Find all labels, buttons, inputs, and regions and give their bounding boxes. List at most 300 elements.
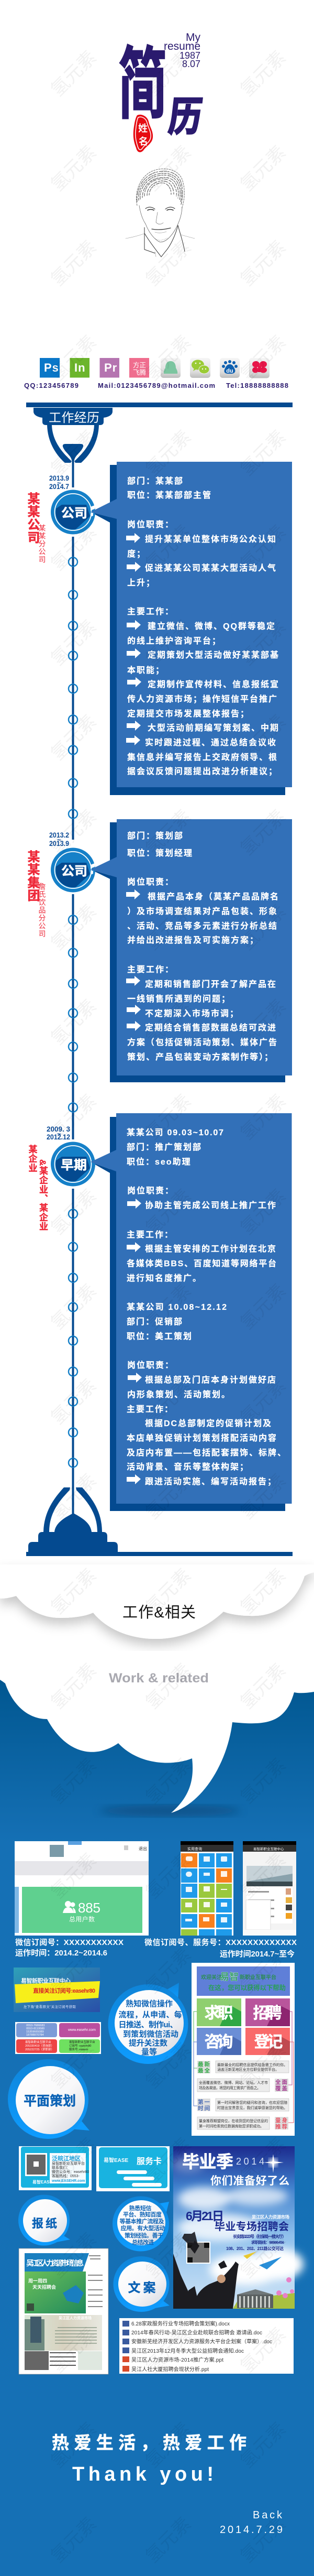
poster: graduation season job fair: 6月21日 [186,2209,224,2223]
bubble: SMS and Baidu skills: 总结改进 [132,2238,154,2246]
newspaper layout [19,2248,108,2374]
heading: resume caption: My [186,31,200,44]
watermark pattern: 氢元素 [142,616,195,670]
banner: contact panels: 订阅号: easehr80 [69,2044,91,2048]
bubble: WeChat skills: 熟知微信操作 [126,1999,173,2008]
card text: 传人力资源市场；操作短信平台推广 [127,694,278,704]
watermark pattern: 氢元素 [47,521,100,575]
icon: In [70,358,89,377]
watermark pattern: 氢元素 [142,332,195,385]
watermark pattern: 氢元素 [47,711,100,765]
pin: cup holder at top of timeline [47,425,99,463]
card text: 上升； [127,578,155,588]
panel: job card 3 [91,1113,292,1511]
company label: 某某公司 某某分公司 [25,492,46,563]
newspaper layout: 天天招聘会 [32,2284,56,2290]
watermark pattern: 氢元素 [142,1186,195,1239]
row: 第一时间: 第一 [198,2099,210,2105]
star flare [264,2154,284,2173]
watermark pattern: 氢元素 [237,1565,290,1618]
icon: 方正飞腾 [129,358,149,377]
row: 全面覆盖: 覆盖 [275,2085,288,2092]
arrows [126,533,141,745]
closing text: 热爱生活，热爱工作: 热爱生活，热爱工作 [52,2433,246,2452]
company label: 某企业 &某企业、某企业: &某企业、某企业 [38,1159,48,1231]
icon: red name seal: 姓 [138,123,148,134]
card text: 进行知名度推广。 [127,1273,202,1283]
back date [220,2509,283,2536]
contact details: Tel:18888888888 [226,382,288,389]
file list [119,2318,294,2374]
watermark pattern: 氢元素 [47,47,100,101]
row: 最新最全 [197,2061,289,2074]
card text: 职位：美工策划 [127,1331,193,1341]
card: service card: 服务卡 [137,2156,162,2166]
card text: 职位：策划经理 [127,848,193,858]
watermark pattern: 氢元素 [142,1091,195,1144]
tile: 登记 [245,2028,290,2055]
card text: 根据总部及门店本身计划做好店 [145,1375,277,1385]
watermark pattern: 氢元素 [142,2514,195,2567]
card text: 、活动、竞品等多元素进行分析总结 [127,921,278,931]
row: 第一时间: 时提出宝贵意见，我们诚挚感谢您的帮助。 [217,2105,287,2110]
watermark pattern: 氢元素 [47,1660,100,1713]
watermark pattern: 氢元素 [47,2324,100,2377]
watermark pattern: 氢元素 [142,711,195,765]
company label: 某某公司 某某分公司: 某某分公司 [38,524,46,563]
card text [127,476,279,776]
watermark pattern: 氢元素 [237,237,290,290]
card: QR business card: 联系我们： [52,2165,70,2170]
watermark pattern: 氢元素 [142,142,195,195]
watermark pattern: 氢元素 [237,332,290,385]
watermark pattern: 氢元素 [237,901,290,954]
decorative white cloud with shadow [0,1564,314,1639]
bubble: 报纸 [18,2195,70,2245]
watermark pattern: 氢元素 [47,901,100,954]
icon: Baidu paw: du [226,368,233,374]
row: 最新最全: 最全 [198,2067,210,2074]
card text: 度； [127,549,146,559]
portrait: pencil sketch of a man [126,169,195,257]
card text: 内形象策划、活动策划。 [127,1389,231,1399]
heading: resume caption: 8.07 [182,59,200,69]
icon: users [63,1901,76,1913]
bubble: SMS and Baidu skills: 应用。有大型活动 [120,2224,165,2232]
card: QR business card: 易智新职业互联平台 [52,2161,85,2166]
banner: contact panels: 205330419（咨询部） [25,2044,54,2048]
newspaper layout: 周一周四 [28,2278,47,2284]
watermark pattern: 氢元素 [237,1280,290,1334]
card text: 部门：策划部 [127,831,184,841]
card text: 部门：推广策划部 [127,1142,202,1152]
banner: subscribe to easehr80: 直接关注订阅号:easehr80 [33,1987,95,1994]
poster: graduation season job fair: 108、201、202、211路公交可达 [226,2246,284,2251]
file list: 安徽新芜经济开发区人力资源服务大平台企划案（草案）.doc [131,2338,272,2345]
watermark pattern: 氢元素 [237,47,290,101]
watermark pattern: 氢元素 [237,2134,290,2188]
watermark pattern: 氢元素 [47,996,100,1049]
watermark pattern: 氢元素 [47,237,100,290]
date: 2013.2 to 2013.9: 2013.2 [49,831,69,839]
card text: 大型活动前期编写策划案、中期 [148,723,279,733]
watermark pattern: 氢元素 [237,427,290,480]
bubble: WeChat skills: 流程，从申请、每 [118,2010,182,2019]
company label: 某某集团 詹氏饮品分公司: 詹氏饮品分公司 [38,883,46,938]
row: 第一时间 [197,2099,289,2112]
bubble: 报纸: 报纸 [32,2217,57,2230]
watermark pattern: 氢元素 [142,1944,195,1998]
watermark pattern: 氢元素 [47,1755,100,1808]
row: 量身推荐: 第一时间检索岗位数据库助您求职成功。 [199,2124,264,2128]
watermark pattern: 氢元素 [142,1850,195,1903]
card text: 一线销售所遇到的问题； [127,994,231,1004]
banner: contact panels [15,2022,101,2054]
card text: 定期策划大型活动做好某某部基 [148,650,279,660]
watermark pattern: 氢元素 [142,996,195,1049]
icon: QQ [161,358,181,378]
bubble: 平面策划 [8,2059,89,2139]
card text: 本职能； [127,665,165,675]
watermark pattern: 氢元素 [142,521,195,575]
card text: 定期提交市场发展整体报告； [127,709,250,719]
watermark pattern: 氢元素 [47,427,100,480]
watermark pattern: 氢元素 [47,806,100,860]
file icons [122,2321,129,2372]
clouds [173,2157,304,2285]
bubble: SMS and Baidu skills: 等基本推广流程及 [119,2218,164,2225]
card text: 职位：seo助理 [127,1157,192,1167]
watermark pattern: 氢元素 [47,2134,100,2188]
company label: 某某公司 某某分公司: 某某公司 [25,492,40,544]
QR code [186,2242,210,2264]
card face [116,1113,292,1504]
card text: 定期制作宣传材料、信息报纸宣 [148,679,279,689]
poster: graduation season job fair: 毕业专场招聘会 [215,2221,289,2233]
watermark pattern: 氢元素 [237,2039,290,2093]
tile: 登记: 登记 [254,2034,283,2051]
screenshot: admin dashboard 885 users [15,1841,149,1936]
row: 第一时间: 时间 [198,2105,210,2112]
watermark pattern: 氢元素 [237,806,290,860]
icon: Pr [99,358,119,377]
watermark pattern: 氢元素 [237,2514,290,2567]
watermark pattern: 氢元素 [47,1091,100,1144]
pin base: dome and steps [26,1483,293,1556]
bubble: WeChat skills: 量等 [141,2047,157,2057]
node: company 2 badge [51,848,117,892]
tile: 招聘: 招聘 [253,2005,282,2022]
bubble: SMS and Baidu skills: 策划经验。善于 [125,2232,163,2239]
banner: contact panels: 0553-8119580 [26,2027,44,2030]
watermark pattern: 氢元素 [142,1375,195,1429]
banner: contact panels: 易智新职业互联平台 [25,2040,51,2044]
company label: 某某集团 詹氏饮品分公司: 某某集团 [25,850,40,901]
card text: 职位：某某部部主管 [127,490,212,500]
watermark pattern: 氢元素 [142,901,195,954]
company label: 某某集团 詹氏饮品分公司 [25,850,46,938]
watermark pattern: 氢元素 [237,1186,290,1239]
watermark pattern: 氢元素 [237,996,290,1049]
icon: 方正飞腾: 方正 [133,361,146,369]
heading: 工作&相关: 工作&相关 [122,1604,196,1621]
banner: subscribe to easehr80 [14,1968,100,2012]
card shadow [110,465,285,795]
card: QR business card: 微信公众号：easehr80 [52,2169,89,2174]
poster: Yizhi platform help [192,1963,295,2136]
watermark pattern: 氢元素 [47,2514,100,2567]
grass and building [233,2289,295,2309]
card text: 策划、产品包装变动方案制作等）； [127,1052,274,1062]
watermark pattern: 氢元素 [47,616,100,670]
watermark pattern: 氢元素 [47,1375,100,1429]
banner: contact panels: 205222725（求职部） [25,2047,54,2051]
connector lines [194,2012,294,2123]
bubble: SMS and Baidu skills [113,2196,169,2252]
company label: 某企业 &某企业、某企业: 某企业 [27,1145,37,1172]
row: 第一时间: 第一时间解答您的疑问和咨询，也欢迎您随 [217,2100,287,2105]
caption: subscription account: 微信订阅号：XXXXXXXXXXX [15,1938,124,1947]
icon row: software and social icons [40,358,270,378]
watermark pattern: 氢元素 [142,237,195,290]
poster: graduation season job fair: 你们准备好了么 [210,2175,289,2187]
row: 全面覆盖: 全面覆盖微信、微博、网站、论坛、人才市 [199,2080,268,2085]
tile: 招聘 [245,1998,290,2026]
card text: 岗位职责： [127,1186,174,1195]
date: 2013.9 to 2014.7: ~ [57,479,61,487]
screenshot: admin dashboard 885 users: 总用户数 [69,1915,95,1923]
watermark pattern: 氢元素 [47,1565,100,1618]
node: company 1 badge: 公司 [61,506,87,520]
contact details [24,382,288,389]
bubble: 文案 [113,2256,170,2312]
screenshot: WeChat article list [243,1841,296,1936]
card text: 提升某某单位整体市场公众认知 [145,534,277,544]
watermark pattern: 氢元素 [47,1944,100,1998]
subheading: Work & related: Work & related [109,1671,209,1686]
bubble: 平面策划: 平面策划 [24,2094,76,2108]
screenshot: admin dashboard 885 users: 885 [78,1900,100,1916]
card text: 本店单独促销计划策划搭配活动内容 [127,1433,277,1443]
icon: red name seal [133,115,153,152]
card: QR business card [19,2146,92,2190]
poster header: 新职业互联平台 [240,1974,276,1981]
card text [127,1127,287,1486]
watermark pattern: 氢元素 [237,1091,290,1144]
watermark pattern: 氢元素 [237,1944,290,1998]
watermark pattern: 氢元素 [142,1660,195,1713]
tile: 求职: 求职 [204,2005,233,2022]
arrows [127,1199,142,1484]
card text: 活动背景、音乐等整体构架； [127,1462,249,1472]
watermark pattern: 氢元素 [142,47,195,101]
watermark pattern: 氢元素 [142,1755,195,1808]
card text: 建立微信、微博、QQ群等稳定 [148,621,276,631]
banner: contact panels: www.easehr.com [68,2028,96,2032]
card text: 集信息并编写报告上交政府领导、根 [127,752,278,762]
row: 全面覆盖 [197,2079,288,2092]
card text: 各媒体类BBS、百度知道等网络平台 [127,1258,277,1268]
poster: graduation season job fair [173,2146,304,2309]
section tab: 工作经历: 工作经历 [49,411,99,425]
callout pointer [91,1162,116,1175]
node: early period badge: 早期 [61,1158,87,1172]
row: 最新最全: 最新最全的招聘信息提供给急需工作的你。 [217,2062,287,2067]
icon: In: In [74,361,86,374]
poster header [197,1966,290,1996]
card text: 根据主管安排的工作计划在北京 [145,1244,277,1254]
newspaper layout: 吴江区人力资源市场 [59,2316,92,2320]
icon: red name seal: 名 [139,136,148,147]
row: 量身推荐 [197,2117,288,2130]
closing text: Thank you!: Thank you! [72,2463,214,2485]
watermark pattern: 氢元素 [237,1660,290,1713]
watermark pattern: 氢元素 [237,2419,290,2472]
card text: 根据DC总部制定的促销计划及 [145,1418,272,1428]
icon: Baidu paw [220,358,240,378]
card: QR business card: 客服热线：0553- [52,2173,80,2178]
watermark pattern: 氢元素 [142,1470,195,1524]
back date: 2014.7.29 [220,2524,283,2536]
back date: Back [253,2509,283,2521]
icon: Pr: Pr [104,361,117,374]
title: 简历 brush characters: 简 [118,41,167,128]
card text: 岗位职责： [127,519,174,529]
card text: 根据产品本身（莫某产品品牌名 [148,892,279,901]
watermark pattern: 氢元素 [142,2039,195,2093]
caption: service account [144,1938,297,1959]
bubble: WeChat skills: 到策划微信活动 [123,2029,178,2039]
card: service card [96,2146,170,2191]
file list: 吴江区人力资源市场-2014推广方案.ppt [131,2356,223,2363]
watermark pattern: 氢元素 [47,2419,100,2472]
file list: 2014年春风行动-吴江区企业赴皖联合招聘会 邀请函.doc [131,2329,262,2336]
poster: graduation season job fair: 长安路3223号（社保局一楼大厅） [233,2234,286,2239]
contact details: QQ:123456789 [24,382,78,389]
card text: 促进某某公司某某大型活动人气 [145,563,277,573]
row: 最新最全: 涵盖汪新芜地区全方位职业提供平台。 [217,2067,279,2072]
watermark pattern: 氢元素 [142,427,195,480]
poster: graduation season job fair: 毕业季 [182,2152,233,2171]
banner: contact panels: 0553-7686683 [26,2024,44,2027]
node: company 1 badge [51,490,117,535]
row: 量身推荐: 量身 [275,2117,288,2124]
icon: 方正飞腾: 飞腾 [133,368,147,376]
bubble: 文案: 文案 [128,2280,156,2295]
bubble: WeChat skills: 提升关注数 [129,2038,167,2048]
tile: 求职 [197,1998,241,2026]
banner: contact panels: 服务号: easeor [69,2047,88,2051]
watermark pattern: 氢元素 [237,1850,290,1903]
card text: 主要工作： [127,1230,174,1240]
panel: job card 1 [91,462,292,795]
panel: job card 2 [91,819,292,1082]
bubble: SMS and Baidu skills: 熟悉短信 [129,2204,152,2212]
screenshot: admin dashboard 885 users: 退出 [139,1846,147,1851]
banner: contact panels: 15359665089 [26,2030,44,2034]
watermark pattern: 氢元素 [47,2229,100,2282]
banner: contact panels: 易智新职业互联平台 [69,2040,95,2044]
callout pointer [91,499,117,526]
card text: 主要工作： [127,964,174,974]
caption: service account: 微信订阅号、服务号：XXXXXXXXXXXXX [144,1938,297,1947]
date: 2013.9 to 2014.7: 2014.7 [49,483,69,491]
card: QR business card: 易智EASE [32,2179,52,2184]
watermark pattern: 氢元素 [142,2324,195,2377]
row: 全面覆盖: 场及各渠道，将您的用工需求广而告之。 [199,2085,261,2090]
watermark pattern: 氢元素 [142,2134,195,2188]
card text: 主要工作： [127,1404,174,1414]
company label: 某企业 &某企业、某企业 [27,1145,48,1231]
node: company 2 badge: 公司 [61,864,87,878]
date: 2013.2 to 2013.9: ~ [57,836,61,844]
watermark pattern: 氢元素 [142,1565,195,1618]
section tab: 工作经历 [33,408,113,425]
title: 简历 brush characters: 历 [166,94,205,139]
card face [117,819,292,1075]
caption: subscription account: 运作时间：2014.2~2014.6 [15,1949,107,1958]
file list: 吴江人社大厦招聘会现状分析.ppt [131,2366,209,2373]
flowers [276,2277,294,2298]
date: 2013.2 to 2013.9 [49,831,69,847]
poster header: 易智 [220,1971,239,1982]
poster: graduation season job fair: 吴江区人力资源市场 [252,2214,289,2220]
bubble: WeChat skills: 日推送、制作ui、 [118,2020,178,2029]
card shadow [110,822,285,1082]
icon: Ps: Ps [44,361,59,374]
card text: 部门：某某部 [127,476,184,486]
card text: 岗位职责： [127,1360,174,1370]
date: 2009.3 to 2012.12 [47,1125,70,1141]
card: service card: 易智EASE [104,2157,129,2164]
watermark pattern: 氢元素 [237,2324,290,2377]
card: QR business card: www.EASEHR.com [51,2179,85,2183]
row: 最新最全: 最新 [198,2061,210,2068]
blue lower section background [0,1675,314,2576]
poster header: 在这，您可以获得以下帮助 [208,1984,286,1992]
row: 量身推荐: 量身推荐期望岗位，在收到您的登记信息的 [199,2118,268,2123]
watermark pattern [47,47,290,2567]
watermark pattern: 氢元素 [47,332,100,385]
card shadow [110,1117,285,1511]
card text: 岗位职责： [127,877,174,887]
watermark pattern: 氢元素 [237,1375,290,1429]
card text: 并给出改进报告及可实施方案； [127,935,259,945]
watermark pattern: 氢元素 [142,1280,195,1334]
file list: 6.28家政服务行业专场招聘会策划案).docx [131,2320,230,2327]
card text: 协助主管完成公司线上推广工作 [145,1200,277,1210]
card text: 方案（包括促销活动策划、媒体广告 [127,1037,278,1047]
graduates silhouette [173,2232,239,2309]
card text: 某某公司 09.03~10.07 [127,1127,225,1137]
heading: resume caption [164,31,200,69]
caption: service account: 运作时间2014.7~至今 [220,1949,295,1959]
tile: 咨询 [197,2028,241,2055]
contact details: Mail:0123456789@hotmail.com [98,382,215,389]
watermark pattern: 氢元素 [142,2419,195,2472]
poster header: 欢迎关注 [201,1974,222,1981]
row: 量身推荐: 推荐 [275,2123,288,2130]
watermark pattern: 氢元素 [142,806,195,860]
title: 简历 brush characters [118,41,205,139]
poster: graduation season job fair: 求职路线：98986456 [251,2240,284,2245]
screenshot: phone service grid [181,1841,233,1936]
card: QR business card: 泛皖江地区 [52,2155,81,2162]
date: 2013.2 to 2013.9: 2013.9 [49,840,69,847]
card text: ）及市场调查结果对产品包装、形象 [127,906,278,916]
paper planes [243,2252,282,2269]
banner: subscribe to easehr80: 左下角“查看原文”关注订阅号获取 [24,2004,76,2009]
